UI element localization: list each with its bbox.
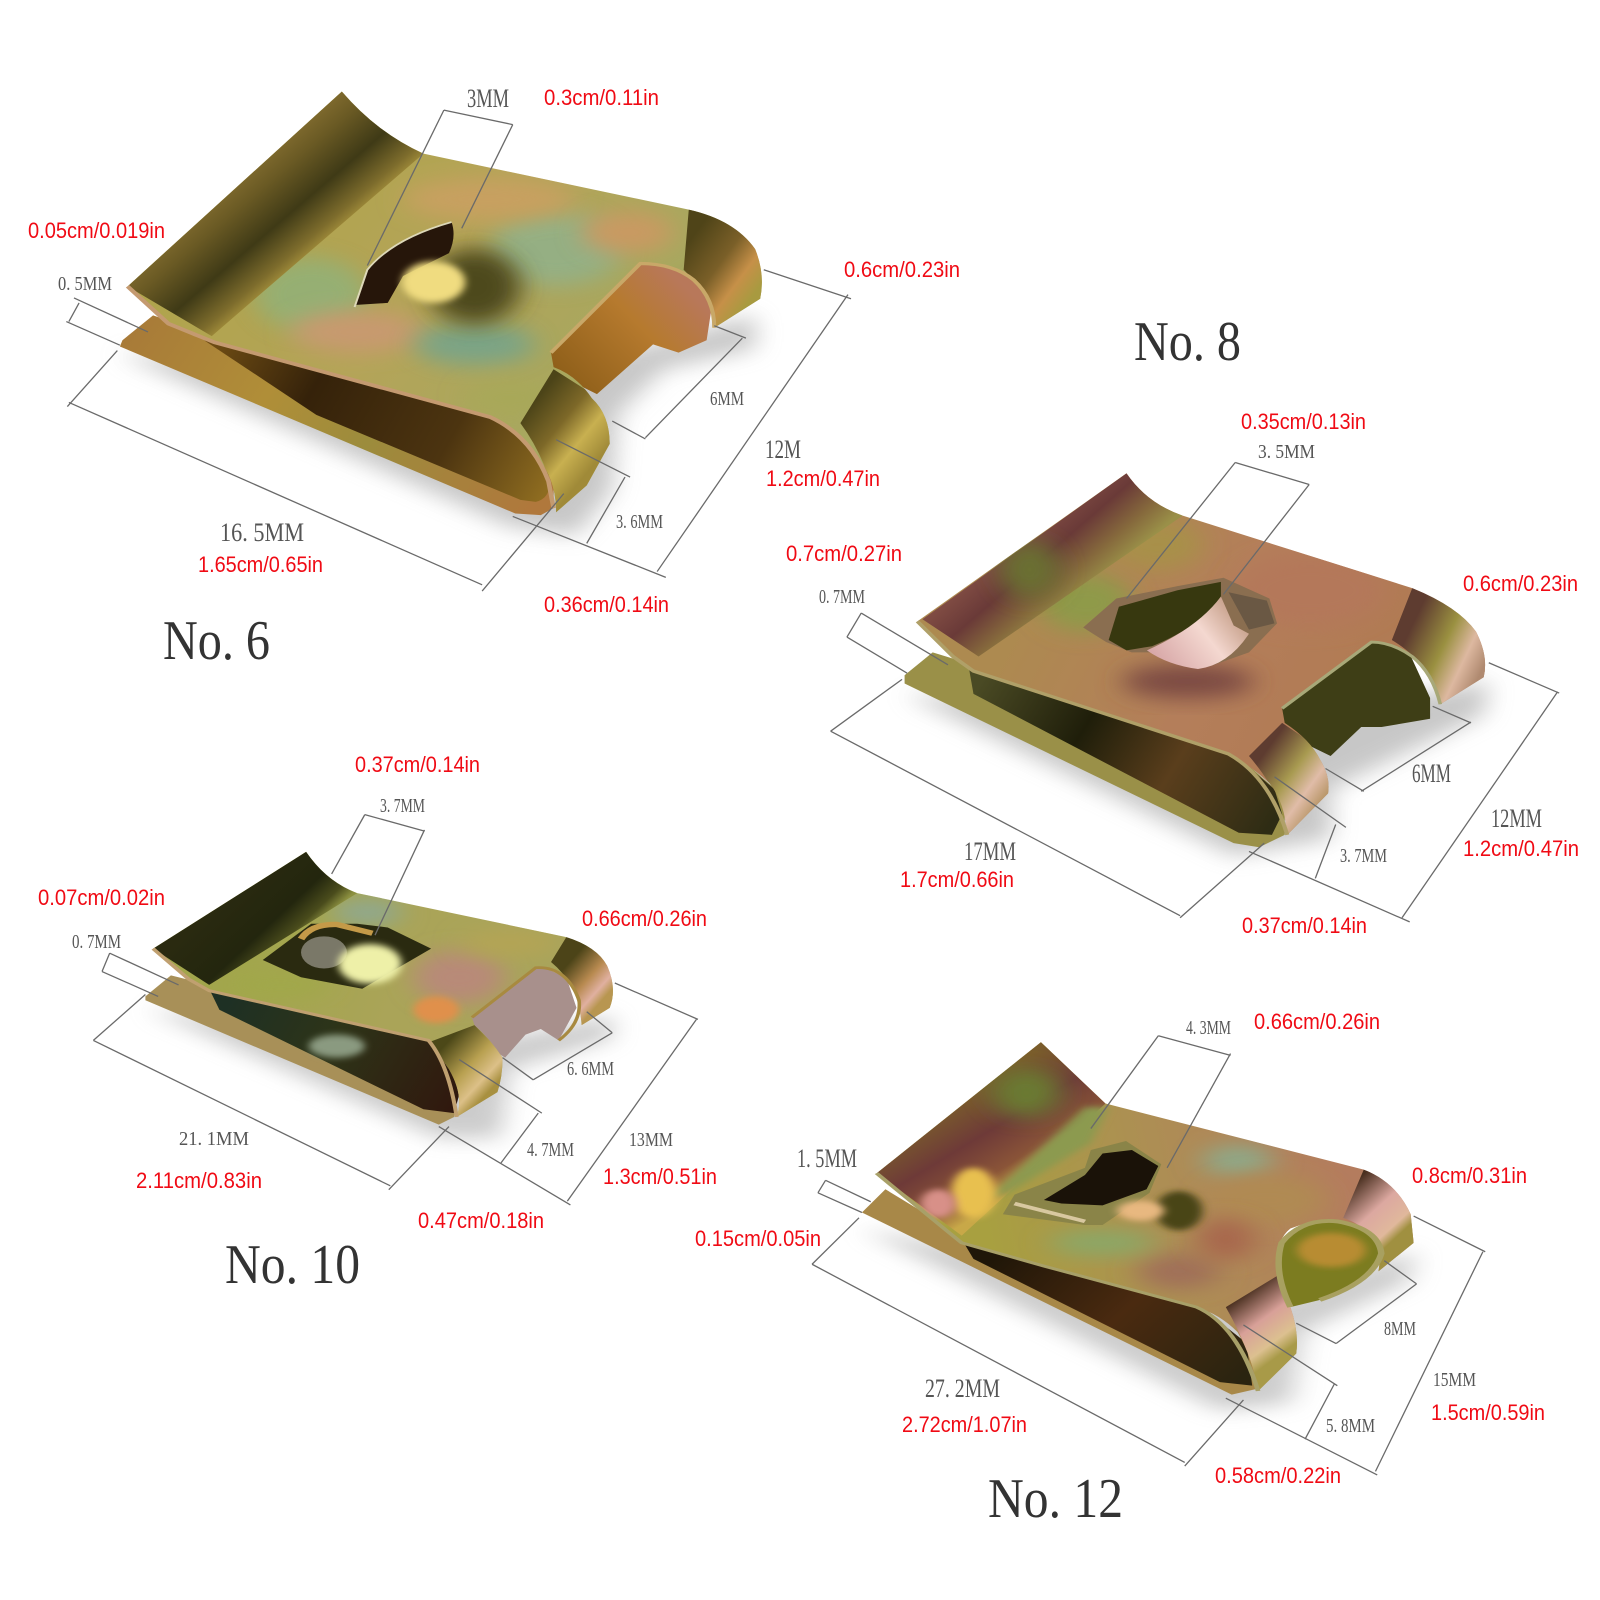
clip nut photo: No. 10 (145, 852, 617, 1138)
label: 6MM: 6MM (710, 388, 744, 410)
label: 0.05cm: 0.05cm/0.019in (28, 218, 165, 243)
label: 12M: 12M (765, 435, 801, 464)
label: 0.7cm: 0.7cm/0.27in (786, 541, 902, 566)
label: 0.15cm: 0.15cm/0.05in (695, 1226, 821, 1251)
label: 0.6cm: 0.6cm/0.23in (1463, 571, 1578, 596)
label: 3.7MM: 3. 7MM (1340, 845, 1387, 867)
label: 0.6cm: 0.6cm/0.23in (844, 257, 960, 282)
label: 17MM: 17MM (964, 837, 1016, 866)
label: 0.5MM: 0. 5MM (58, 273, 112, 295)
label: 0.37cm: 0.37cm/0.14in (355, 752, 480, 777)
label: 0.35cm: 0.35cm/0.13in (1241, 409, 1366, 434)
label: 3MM: 3MM (467, 84, 509, 113)
label: 4.7MM: 4. 7MM (527, 1139, 574, 1161)
label: 1.5cm: 1.5cm/0.59in (1431, 1400, 1545, 1425)
label: 1.65cm: 1.65cm/0.65in (198, 552, 323, 577)
panel: No. 8 clip (786, 311, 1579, 938)
label: 5.8MM: 5. 8MM (1326, 1415, 1375, 1437)
clip nut photo: No. 12 (862, 1042, 1419, 1411)
clip nut photo: No. 8 (905, 473, 1489, 856)
label: 0.7MM: 0. 7MM (72, 931, 121, 953)
label: 21.1MM: 21. 1MM (179, 1128, 249, 1150)
label: 13MM: 13MM (629, 1129, 673, 1151)
clip nut photo: No. 6 (117, 91, 765, 535)
label: 0.58cm: 0.58cm/0.22in (1215, 1463, 1341, 1488)
dimension lines: No. 8 (831, 463, 1559, 922)
label: 0.66cm: 0.66cm/0.26in (1254, 1009, 1380, 1034)
label: 1.5MM: 1. 5MM (797, 1144, 857, 1173)
label: 8MM: 8MM (1384, 1318, 1416, 1340)
title: No. 6: No. 6 (163, 610, 270, 672)
dimension lines: No. 12 (812, 1036, 1485, 1475)
panel: No. 6 clip (28, 84, 960, 672)
label: 27.2MM: 27. 2MM (925, 1374, 1000, 1403)
dimension lines: No. 10 (93, 815, 698, 1205)
label: 1.2cm: 1.2cm/0.47in (1463, 836, 1579, 861)
label: 6MM: 6MM (1412, 759, 1451, 788)
label: 4.3MM: 4. 3MM (1186, 1017, 1231, 1039)
label: 1.3cm: 1.3cm/0.51in (603, 1164, 717, 1189)
label: 0.07cm: 0.07cm/0.02in (38, 885, 165, 910)
label: 3.7MM: 3. 7MM (380, 795, 425, 817)
label: 0.7MM: 0. 7MM (819, 586, 865, 608)
label: 2.11cm: 2.11cm/0.83in (136, 1168, 262, 1193)
label: 0.47cm: 0.47cm/0.18in (418, 1208, 544, 1233)
label: 16.5MM: 16. 5MM (220, 518, 304, 547)
label: 0.37cm: 0.37cm/0.14in (1242, 913, 1367, 938)
label: 3.5MM: 3. 5MM (1258, 441, 1315, 463)
dimension lines: No. 6 (66, 110, 851, 591)
title: No. 8: No. 8 (1134, 311, 1241, 373)
label: 2.72cm: 2.72cm/1.07in (902, 1412, 1027, 1437)
panel: No. 12 clip (695, 1009, 1545, 1530)
label: 0.36cm: 0.36cm/0.14in (544, 592, 669, 617)
title: No. 10: No. 10 (225, 1234, 360, 1296)
label: 15MM: 15MM (1433, 1369, 1476, 1391)
label: 3.6MM: 3. 6MM (616, 511, 663, 533)
title: No. 12: No. 12 (988, 1468, 1123, 1530)
label: 1.7cm: 1.7cm/0.66in (900, 867, 1014, 892)
label: 0.8cm: 0.8cm/0.31in (1412, 1163, 1527, 1188)
label: 1.2cm: 1.2cm/0.47in (766, 466, 880, 491)
panel: No. 10 clip (38, 752, 717, 1296)
label: 6.6MM: 6. 6MM (567, 1058, 614, 1080)
label: 12MM: 12MM (1491, 804, 1542, 833)
label: 0.3cm: 0.3cm/0.11in (544, 85, 659, 110)
label: 0.66cm: 0.66cm/0.26in (582, 906, 707, 931)
